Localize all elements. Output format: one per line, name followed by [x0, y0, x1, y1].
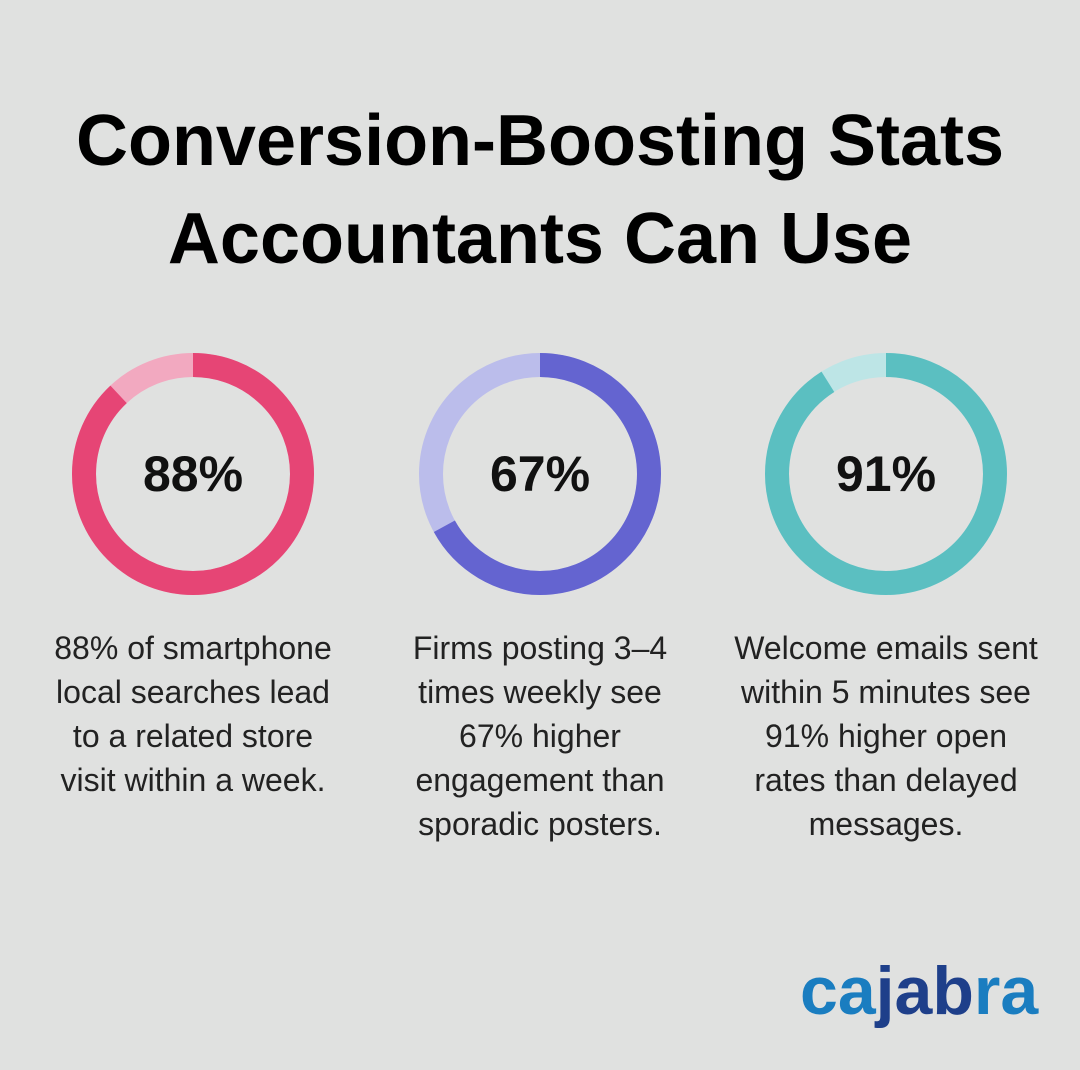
text: stat 3: messages.	[809, 806, 963, 842]
title: Conversion-Boosting Stats	[76, 101, 1004, 181]
text: stat 2	[413, 630, 667, 842]
text: stat 1: 88% of smartphone	[54, 630, 332, 666]
text: stat 1: local searches lead	[56, 674, 330, 710]
title	[76, 101, 1004, 279]
text: stat 2: engagement than	[415, 762, 665, 798]
text: stat 3: 91% higher open	[765, 718, 1007, 754]
logo: cajabra	[800, 953, 1038, 1029]
donut: 67%	[419, 353, 661, 595]
text: stat 2: times weekly see	[418, 674, 662, 710]
donut: 88%: 88%	[143, 446, 243, 502]
text: stat 2: 67% higher	[459, 718, 621, 754]
donut: 67%: 67%	[490, 446, 590, 502]
text: stat 3: Welcome emails sent	[734, 630, 1038, 666]
text: stat 3	[734, 630, 1038, 842]
donut: 91%: 91%	[836, 446, 936, 502]
text: stat 1: to a related store	[73, 718, 313, 754]
text: stat 3: rates than delayed	[754, 762, 1018, 798]
title: Accountants Can Use	[168, 199, 912, 279]
text: stat 1	[54, 630, 332, 798]
donut: 88%	[72, 353, 314, 595]
text: stat 2: sporadic posters.	[418, 806, 662, 842]
text: stat 1: visit within a week.	[60, 762, 325, 798]
text: stat 3: within 5 minutes see	[741, 674, 1031, 710]
text: stat 2: Firms posting 3–4	[413, 630, 667, 666]
donut: 91%	[765, 353, 1007, 595]
